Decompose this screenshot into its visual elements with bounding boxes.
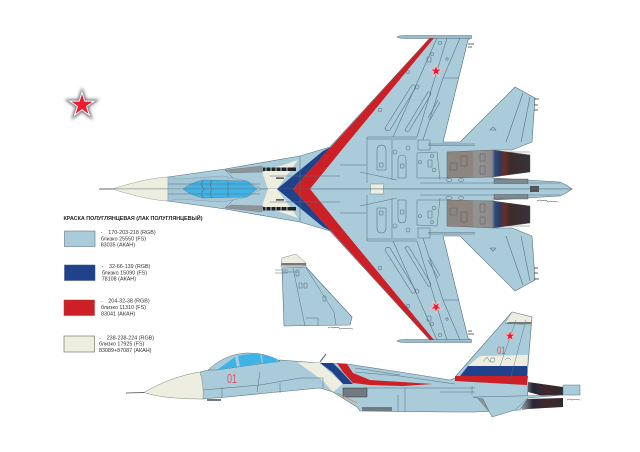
fuselage number: 01 [227, 371, 237, 386]
legend heading: КРАСКА ПОЛУГЛЯНЦЕВАЯ (ЛАК ПОЛУГЛЯНЦЕВЫЙ) [64, 214, 203, 222]
legend item: red: - [101, 299, 103, 305]
legend item: cream [64, 335, 154, 354]
fin tip stripe [506, 322, 531, 324]
legend item: dark blue: 78108 (АКАН) [102, 277, 136, 283]
tailplane [473, 395, 563, 417]
canopy [183, 180, 257, 189]
fin dark stripe [282, 263, 306, 266]
legend item: red: близко 11310 (FS) [101, 305, 146, 311]
legend item: cream: близко 17925 (FS) [99, 342, 145, 348]
radome [112, 177, 168, 189]
vent grid [494, 179, 539, 189]
side nose probe [126, 392, 144, 394]
fin number: 01 [497, 345, 506, 357]
upper nozzle [528, 382, 563, 396]
intake vent grid [343, 388, 367, 397]
side panel lines [203, 368, 475, 412]
legend item: red [64, 299, 150, 317]
legend item: light blue: 170-203-218 (RGB) [108, 230, 156, 236]
fin cream band [468, 355, 528, 366]
fin panel lines [275, 268, 336, 326]
legend item: red: 83041 (АКАН) [101, 311, 136, 317]
signature: fin [328, 327, 353, 329]
grey spine panels [225, 166, 296, 179]
wingtip rail [397, 36, 472, 38]
legend item: light blue: 83035 (АКАН) [101, 243, 135, 249]
wing panel lines and pylons [377, 38, 464, 182]
fin cream tip [281, 254, 306, 267]
nose probe [99, 188, 113, 190]
cream panel [370, 184, 384, 189]
horizontal tail details [468, 44, 539, 142]
legend item: dark blue [64, 264, 151, 283]
engine panel details [450, 154, 485, 174]
canopy frames [202, 180, 228, 189]
legend item: light blue [64, 230, 156, 249]
fin cream tip [505, 312, 532, 325]
separate vertical fin [275, 254, 353, 329]
engine bay and nozzle [447, 150, 530, 178]
orange intake line [337, 393, 357, 403]
fin red band [455, 376, 528, 385]
fin panel lines [483, 320, 526, 380]
fin body [282, 267, 352, 326]
fin roundel star [505, 330, 515, 340]
legend item: light blue: близко 25550 (FS) [101, 236, 146, 242]
cream sweep [297, 362, 343, 392]
fin blue band [460, 366, 527, 376]
roundel star on wing [430, 64, 442, 76]
red sweep [337, 363, 433, 386]
signature: top view [537, 200, 558, 202]
lower nozzle [520, 398, 563, 410]
legend item: cream: 83089+87087 (АКАН) [99, 348, 152, 354]
top view: upper half of aircraft [99, 36, 572, 189]
legend item: dark blue: 32-66-139 (RGB) [109, 264, 151, 270]
tail boom [563, 385, 580, 395]
legend item: dark blue: близко 15090 (FS) [102, 270, 147, 276]
panel: paint legend [64, 214, 203, 354]
fuselage panel lines [168, 137, 560, 189]
icon: large red star [68, 90, 96, 117]
legend item: dark blue: - [102, 264, 104, 270]
red chevron stripe [293, 38, 434, 189]
legend item: light blue: - [101, 230, 103, 236]
legend item: cream: 238-238-224 (RGB) [107, 335, 154, 341]
underside fittings [207, 399, 392, 411]
cockpit surround [168, 176, 262, 189]
blue chevron [277, 147, 331, 189]
legend item: cream: - [99, 335, 101, 341]
fuselage side [200, 360, 528, 412]
blue sweep [320, 363, 353, 384]
cream chevron [262, 160, 298, 189]
signature: side view [567, 399, 580, 400]
fuselage and wing silhouette [112, 38, 572, 189]
legend item: red: 204-32-38 (RGB) [108, 299, 150, 305]
top view: mirrored lower half of aircraft [99, 189, 572, 342]
antenna [320, 354, 326, 362]
grey ventral bay [477, 398, 492, 415]
side radome [144, 372, 203, 399]
tail fin [455, 312, 532, 377]
side view aircraft [126, 312, 580, 417]
canopy [208, 353, 280, 370]
